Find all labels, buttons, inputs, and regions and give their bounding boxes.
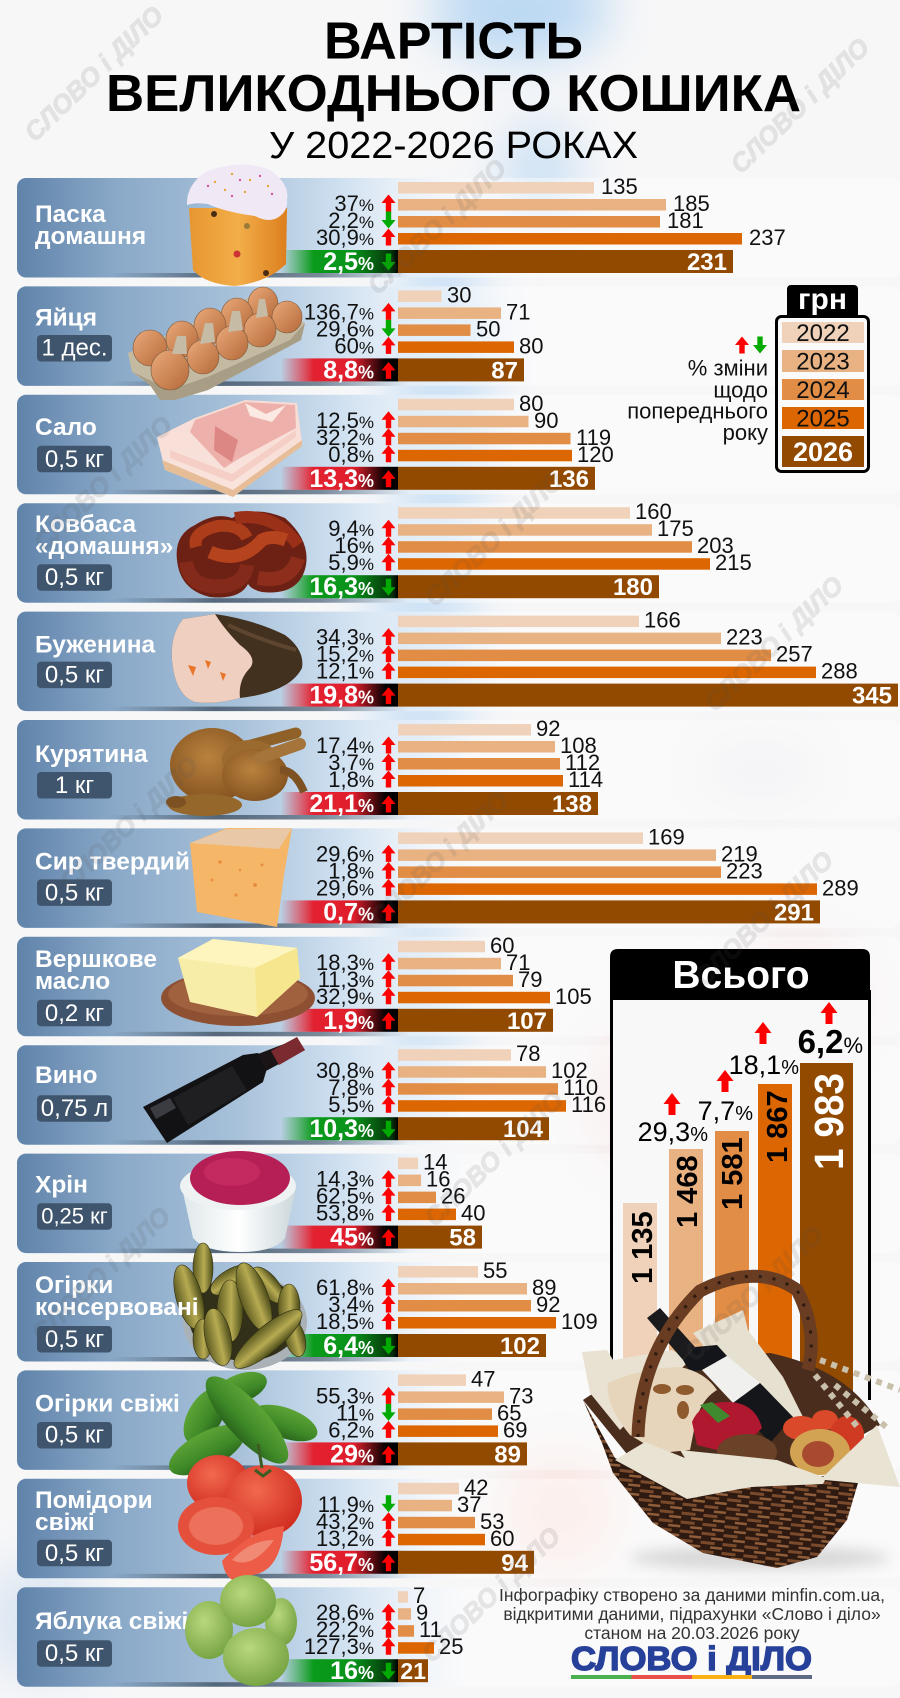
bar chart: 138 xyxy=(552,791,592,818)
legend note: року xyxy=(723,420,768,445)
bar chart: 135 xyxy=(601,174,638,199)
percent changes: 0,7% xyxy=(323,898,374,926)
bar chart: 223 xyxy=(726,858,763,883)
bar chart: 79 xyxy=(518,967,542,992)
panel: Огірки свіжі xyxy=(35,1365,533,1486)
legend years: 2023 xyxy=(796,348,850,376)
icon: roast chicken xyxy=(166,728,304,816)
percent changes: 1,8% xyxy=(328,858,374,883)
percent changes xyxy=(281,299,398,384)
percent changes xyxy=(281,1492,398,1577)
unit badge: 0,75 л xyxy=(41,1095,108,1122)
legend years: 2026 xyxy=(793,437,853,467)
watermarks: СЛОВО і ДІЛО xyxy=(53,750,204,897)
percent changes xyxy=(281,1383,398,1468)
bar chart: 231 xyxy=(687,249,727,276)
bar chart: 119 xyxy=(576,425,611,450)
percent changes: 29,6% xyxy=(316,316,374,341)
panel: total chart xyxy=(582,949,900,1570)
row label: Сало xyxy=(35,414,97,441)
bar chart: 203 xyxy=(697,533,734,558)
bar chart: 80 xyxy=(519,333,543,358)
row label xyxy=(35,511,173,560)
title: ВАРТІСТЬ xyxy=(324,12,583,70)
bar chart: 92 xyxy=(536,1292,560,1317)
chart frame xyxy=(610,949,870,1400)
bar chart: 112 xyxy=(565,750,600,775)
bar chart: 11 xyxy=(419,1617,442,1642)
unit badge: 0,2 кг xyxy=(45,1000,104,1027)
row label: Огірки xyxy=(35,1272,113,1299)
percent changes: 17,4% xyxy=(316,733,374,758)
percent changes xyxy=(281,1275,398,1360)
percent changes xyxy=(281,1167,398,1252)
percent changes: 6,4% xyxy=(323,1332,374,1360)
watermarks: СЛОВО і ДІЛО xyxy=(698,570,849,717)
total percent changes: 7,7% xyxy=(698,1096,753,1126)
percent changes xyxy=(281,1058,398,1143)
percent changes: 21,1% xyxy=(309,790,374,818)
source note: станом на 20.03.2026 року xyxy=(584,1623,800,1643)
bar chart xyxy=(398,174,786,276)
percent changes: 34,3% xyxy=(316,625,374,650)
bar chart xyxy=(398,1475,534,1577)
total bars: 1 867 xyxy=(762,1090,794,1163)
bar chart xyxy=(398,1583,463,1684)
percent changes xyxy=(281,950,398,1035)
panel: Буженина xyxy=(35,608,898,710)
percent changes: 30,9% xyxy=(316,225,374,250)
percent changes: 14,3% xyxy=(316,1167,374,1192)
icon: salo xyxy=(157,400,302,497)
percent changes: 29,6% xyxy=(316,875,374,900)
bar chart: 104 xyxy=(503,1116,544,1143)
panel: Сир твердий xyxy=(35,824,859,927)
icon: sausage xyxy=(177,512,307,597)
percent changes: 1,8% xyxy=(328,767,374,792)
row label: Вершкове xyxy=(35,946,157,973)
panel: Яйця xyxy=(35,282,543,400)
bar chart: 53 xyxy=(480,1509,504,1534)
bar chart xyxy=(398,1258,598,1360)
panel: Яблука свіжі xyxy=(35,1575,463,1686)
row label xyxy=(35,201,146,250)
percent changes: 30,8% xyxy=(316,1058,374,1083)
bar chart: 55 xyxy=(483,1258,507,1283)
watermarks: СЛОВО і ДІЛО xyxy=(361,153,512,300)
watermarks: СЛОВО і ДІЛО xyxy=(678,1220,829,1367)
bar chart: 87 xyxy=(491,357,518,384)
total percent changes xyxy=(638,1002,863,1147)
bar chart: 109 xyxy=(561,1309,598,1334)
bar chart xyxy=(398,824,859,926)
bar chart: 175 xyxy=(657,516,694,541)
percent changes: 45% xyxy=(330,1224,374,1252)
watermarks: СЛОВО і ДІЛО xyxy=(724,32,875,179)
source note xyxy=(499,1585,885,1643)
bar chart: 37 xyxy=(457,1492,481,1517)
chart heading: Всього xyxy=(672,954,810,997)
percent changes: 43,2% xyxy=(316,1509,374,1534)
bar chart: 50 xyxy=(476,316,500,341)
legend unit tab xyxy=(787,283,858,319)
row label: Паска xyxy=(35,201,106,228)
bar chart: 257 xyxy=(776,642,813,667)
panel: Огірки консервовані xyxy=(35,1243,598,1377)
legend note: попереднього xyxy=(627,398,768,424)
total bars: 1 581 xyxy=(717,1137,749,1210)
row label: Сир твердий xyxy=(35,848,190,875)
panel: Вино xyxy=(35,1037,606,1143)
bar chart: 9 xyxy=(416,1600,428,1625)
bar chart: 92 xyxy=(536,716,560,741)
unit badge: 0,5 кг xyxy=(45,879,104,906)
percent changes: 11% xyxy=(336,1400,374,1425)
bar chart: 107 xyxy=(507,1008,547,1035)
percent changes: 10,3% xyxy=(309,1115,374,1143)
bar chart: 60 xyxy=(490,1526,514,1551)
panel: Вершкове масло xyxy=(35,933,592,1035)
watermarks: СЛОВО і ДІЛО xyxy=(27,410,178,557)
bar chart: 289 xyxy=(822,875,859,900)
percent changes: 1,9% xyxy=(323,1007,374,1035)
percent changes xyxy=(281,191,398,276)
icon: eggs in carton xyxy=(128,287,305,400)
legend note: щодо xyxy=(713,378,768,402)
row label: Огірки свіжі xyxy=(35,1390,180,1417)
percent changes: 9,4% xyxy=(328,516,374,541)
bar chart: 94 xyxy=(501,1550,529,1577)
bar chart: 90 xyxy=(534,408,558,433)
bar chart: 110 xyxy=(563,1075,598,1100)
percent changes: 12,1% xyxy=(316,659,374,684)
icon: fresh cucumbers xyxy=(161,1365,322,1486)
row label: Яблука свіжі xyxy=(35,1608,188,1635)
row label xyxy=(35,1487,153,1536)
percent changes: 32,2% xyxy=(316,425,374,450)
bar chart: 291 xyxy=(774,899,814,926)
panel: Курятина xyxy=(35,716,603,818)
bar chart: 7 xyxy=(413,1583,425,1608)
title: У 2022-2026 РОКАХ xyxy=(269,125,638,167)
bar chart: 166 xyxy=(644,608,681,633)
icon: Easter basket xyxy=(582,1276,900,1570)
bar chart: 105 xyxy=(555,984,592,1009)
icon: beet horseradish xyxy=(180,1151,296,1252)
icon: roast pork xyxy=(172,614,302,703)
percent changes: 13,2% xyxy=(316,1526,374,1551)
bar chart: 47 xyxy=(471,1366,495,1391)
percent changes: 5,5% xyxy=(328,1092,374,1117)
total bars: 1 983 xyxy=(806,1073,852,1170)
total percent changes: 29,3% xyxy=(638,1117,708,1147)
bar chart: 108 xyxy=(560,733,597,758)
legend note xyxy=(627,336,768,445)
percent changes: 55,3% xyxy=(316,1383,374,1408)
bar chart xyxy=(398,608,898,710)
bar chart xyxy=(398,933,592,1035)
percent changes: 5,9% xyxy=(328,550,374,575)
icon: apples xyxy=(185,1575,297,1686)
source note: Інфографіку створено за даними minfin.com.ua, xyxy=(499,1585,885,1605)
icon: tomatoes xyxy=(178,1444,302,1581)
percent changes: 136,7% xyxy=(304,299,374,324)
source note: відкритими даними, підрахунки «Слово і діло» xyxy=(503,1604,881,1624)
bar chart: 215 xyxy=(715,550,752,575)
total bars: 1 468 xyxy=(672,1155,704,1228)
bar chart: 160 xyxy=(635,499,672,524)
bar chart: 30 xyxy=(447,282,471,307)
percent changes: 7,8% xyxy=(328,1075,374,1100)
panel: Сало xyxy=(35,391,614,497)
percent changes: 15,2% xyxy=(316,642,374,667)
bar chart: 219 xyxy=(721,841,758,866)
watermarks: СЛОВО і ДІЛО xyxy=(25,1201,176,1348)
percent changes: 22,2% xyxy=(316,1617,374,1642)
bar chart: 71 xyxy=(506,950,530,975)
total percent changes: 18,1% xyxy=(729,1050,799,1080)
bar chart: 60 xyxy=(490,933,514,958)
legend unit tab: грн xyxy=(798,283,847,316)
watermarks: СЛОВО і ДІЛО xyxy=(418,1085,569,1232)
bar chart xyxy=(398,716,603,818)
total bars: 1 135 xyxy=(627,1211,659,1284)
icon: butter on plate xyxy=(161,939,315,1026)
row label: Буженина xyxy=(35,632,156,659)
bar chart: 89 xyxy=(494,1441,521,1468)
bar chart: 180 xyxy=(613,574,653,601)
row label: Курятина xyxy=(35,741,148,768)
bar chart: 114 xyxy=(568,767,603,792)
row label: домашня xyxy=(35,223,146,250)
panel: Помідори свіжі xyxy=(35,1444,534,1581)
unit badge: 1 дес. xyxy=(41,334,108,361)
bar chart: 65 xyxy=(497,1400,521,1425)
bar chart: 288 xyxy=(821,659,858,684)
bar chart: 223 xyxy=(726,625,763,650)
percent changes: 56,7% xyxy=(309,1549,374,1577)
percent changes: 53,8% xyxy=(316,1201,374,1226)
percent changes: 8,8% xyxy=(323,356,374,384)
bar chart: 16 xyxy=(426,1167,450,1192)
percent changes: 62,5% xyxy=(316,1184,374,1209)
bar chart: 89 xyxy=(532,1275,556,1300)
percent changes: 2,2% xyxy=(328,208,374,233)
bar chart xyxy=(398,1041,606,1143)
percent changes: 28,6% xyxy=(316,1600,374,1625)
bar chart: 169 xyxy=(648,824,685,849)
legend xyxy=(627,283,868,472)
unit badge: 0,5 кг xyxy=(45,662,104,689)
percent changes: 16% xyxy=(334,533,374,558)
row label: «домашня» xyxy=(35,533,173,560)
total percent changes: 6,2% xyxy=(798,1023,863,1060)
row label: консервовані xyxy=(35,1294,199,1321)
percent changes xyxy=(281,516,398,601)
percent changes: 16% xyxy=(330,1657,374,1685)
percent changes: 18,5% xyxy=(316,1309,374,1334)
percent changes: 6,2% xyxy=(328,1417,374,1442)
percent changes: 37% xyxy=(334,191,374,216)
unit badge: 0,5 кг xyxy=(45,1326,104,1353)
title xyxy=(106,12,801,167)
bar chart xyxy=(398,391,614,493)
panel: Паска домашня xyxy=(35,164,786,286)
bar chart: 181 xyxy=(667,208,704,233)
percent changes: 3,7% xyxy=(328,750,374,775)
percent changes xyxy=(281,733,398,818)
row label: Ковбаса xyxy=(35,511,136,538)
percent changes: 18,3% xyxy=(316,950,374,975)
percent changes xyxy=(281,841,398,926)
bar chart: 58 xyxy=(449,1225,476,1252)
legend note: % зміни xyxy=(688,356,768,380)
bar chart: 26 xyxy=(441,1184,465,1209)
bar chart: 40 xyxy=(461,1201,485,1226)
bar chart: 237 xyxy=(749,225,786,250)
unit badge xyxy=(37,772,112,799)
percent changes: 0,8% xyxy=(328,442,374,467)
percent changes: 29,6% xyxy=(316,841,374,866)
bar chart xyxy=(398,282,543,384)
unit badge: 0,25 кг xyxy=(41,1204,108,1229)
legend years: 2024 xyxy=(796,377,850,404)
bar chart: 120 xyxy=(577,442,614,467)
watermarks: СЛОВО і ДІЛО xyxy=(18,0,169,147)
percent changes: 60% xyxy=(334,333,374,358)
icon: paska xyxy=(187,164,287,286)
bar chart: 116 xyxy=(571,1092,606,1117)
row label: Хрін xyxy=(35,1172,88,1199)
row label: масло xyxy=(35,968,110,995)
bar chart: 78 xyxy=(516,1041,540,1066)
percent changes: 12,5% xyxy=(316,408,374,433)
percent changes: 11,9% xyxy=(318,1492,374,1517)
bar chart: 42 xyxy=(464,1475,488,1500)
icon: hard cheese xyxy=(190,828,292,927)
percent changes: 19,8% xyxy=(309,682,374,710)
bar chart: 25 xyxy=(439,1634,463,1659)
legend years xyxy=(776,316,868,472)
percent changes xyxy=(281,408,398,493)
bar chart: 69 xyxy=(503,1417,527,1442)
bar chart: 102 xyxy=(551,1058,588,1083)
unit badge: 0,5 кг xyxy=(45,446,104,473)
bar chart: 73 xyxy=(509,1383,533,1408)
bar chart: 185 xyxy=(673,191,710,216)
watermarks: СЛОВО і ДІЛО xyxy=(688,845,839,992)
panel: Ковбаса домашня xyxy=(35,499,752,601)
unit badge: 0,5 кг xyxy=(45,1421,104,1448)
bar chart xyxy=(398,1366,533,1468)
percent changes: 16,3% xyxy=(309,573,374,601)
unit badge: 0,5 кг xyxy=(45,1540,104,1567)
bar chart: 80 xyxy=(519,391,543,416)
percent changes: 32,9% xyxy=(316,984,374,1009)
row label: Помідори xyxy=(35,1487,153,1514)
unit badge: 0,5 кг xyxy=(45,1640,104,1667)
percent changes: 29% xyxy=(330,1440,374,1468)
watermarks: СЛОВО і ДІЛО xyxy=(415,1521,566,1668)
percent changes xyxy=(281,1600,398,1685)
percent changes: 11,3% xyxy=(318,967,374,992)
logo: СЛОВО і ДІЛО xyxy=(571,1640,812,1677)
total bars xyxy=(623,1063,853,1393)
title: ВЕЛИКОДНЬОГО КОШИКА xyxy=(106,65,801,123)
row label: Вино xyxy=(35,1062,98,1089)
watermarks: СЛОВО і ДІЛО xyxy=(363,785,514,932)
bar chart: 102 xyxy=(500,1333,540,1360)
row label: свіжі xyxy=(35,1509,95,1536)
percent changes xyxy=(281,625,398,710)
unit badge: 1 кг xyxy=(55,772,94,799)
panel: Хрін xyxy=(35,1150,485,1252)
percent changes: 61,8% xyxy=(316,1275,374,1300)
bar chart: 136 xyxy=(549,466,589,493)
bar chart: 345 xyxy=(852,683,892,710)
bar chart: 21 xyxy=(400,1658,426,1684)
legend years: 2022 xyxy=(796,320,850,347)
row label xyxy=(35,946,157,995)
watermarks: СЛОВО і ДІЛО xyxy=(418,465,569,612)
icon: pickled cucumbers xyxy=(168,1243,310,1377)
row label: Яйця xyxy=(35,304,97,331)
bar chart xyxy=(398,499,752,601)
percent changes: 13,3% xyxy=(309,465,374,493)
row label xyxy=(35,1272,199,1321)
bar chart: 14 xyxy=(423,1150,447,1175)
legend years: 2025 xyxy=(796,406,850,432)
unit badge: 0,5 кг xyxy=(45,564,104,591)
bar chart: 71 xyxy=(506,299,530,324)
icon: wine bottle xyxy=(143,1037,305,1143)
percent changes: 2,5% xyxy=(323,248,374,276)
percent changes: 3,4% xyxy=(328,1292,374,1317)
percent changes: 127,3% xyxy=(304,1634,374,1659)
bar chart xyxy=(398,1150,485,1252)
